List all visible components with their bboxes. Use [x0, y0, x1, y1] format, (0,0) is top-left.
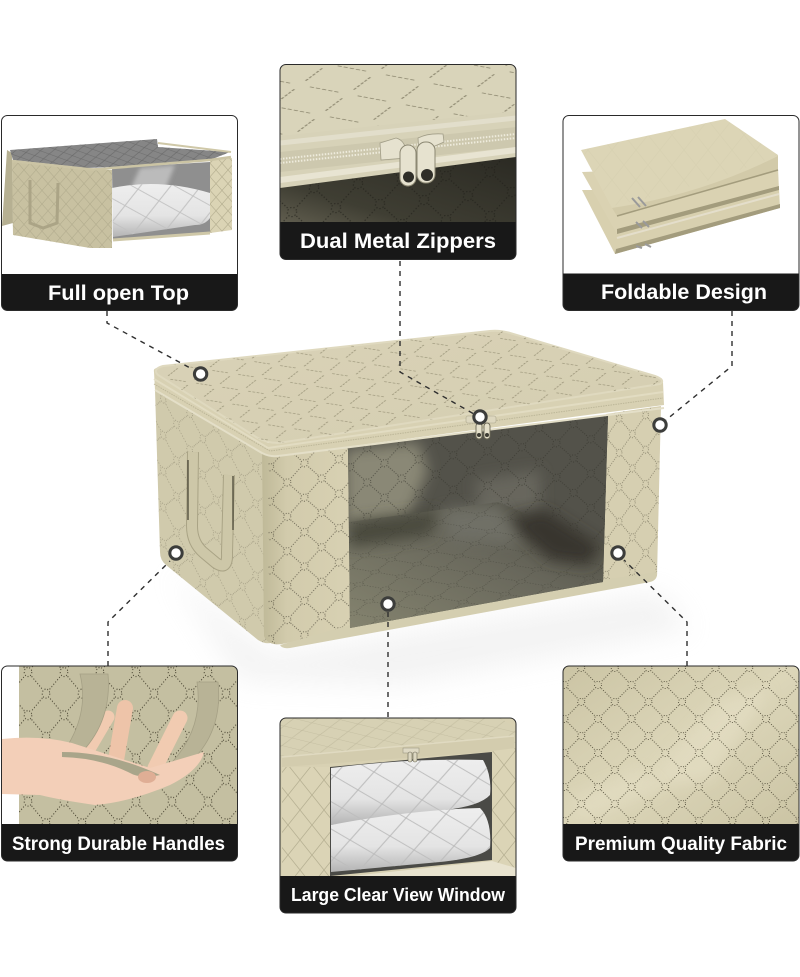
- handle and hand illustration: [2, 666, 239, 826]
- caption: Large Clear View Window: [291, 884, 506, 905]
- panel: foldable design: [561, 116, 800, 314]
- leader lines: [107, 261, 732, 718]
- marker: foldable: [654, 419, 666, 431]
- leader: premium quality fabric: [624, 560, 687, 666]
- panel: strong durable handles: [0, 666, 240, 864]
- box zipper pulls: [466, 416, 496, 439]
- label bar: [2, 824, 237, 860]
- clear view window: [348, 416, 608, 628]
- leader: dual metal zippers: [400, 261, 474, 414]
- callout markers: [170, 368, 666, 610]
- caption: Dual Metal Zippers: [300, 230, 496, 253]
- label bar: [278, 222, 518, 262]
- box bottom rim: [280, 572, 657, 648]
- box side handle: [188, 452, 233, 565]
- box front right panel: [602, 406, 661, 586]
- caption: Foldable Design: [601, 281, 767, 304]
- label bar: [2, 274, 237, 310]
- panel: large clear view window: [278, 718, 518, 916]
- box ground shadow: [170, 570, 690, 685]
- marker: handle: [170, 547, 182, 559]
- leader: strong durable handles: [108, 561, 170, 666]
- caption: Strong Durable Handles: [12, 833, 225, 855]
- marker: top: [194, 368, 207, 380]
- window with pillows illustration: [280, 718, 516, 876]
- panel: dual metal zippers: [278, 64, 518, 262]
- caption: Premium Quality Fabric: [575, 833, 787, 855]
- folded stack illustration: [581, 119, 780, 254]
- label bar: [564, 824, 798, 860]
- box left side with fabric pattern: [155, 390, 275, 643]
- box front left panel: [262, 446, 352, 644]
- marker: window: [382, 598, 394, 610]
- label bar: [280, 876, 516, 912]
- box lid zipper band: [154, 368, 664, 456]
- fabric swatch: [563, 666, 799, 826]
- marker: zipper: [474, 411, 486, 423]
- leader: large clear view window: [387, 612, 389, 718]
- leader: foldable design: [666, 311, 732, 420]
- main product: storage box: [154, 331, 690, 685]
- leader: full open top: [107, 311, 192, 369]
- panel: premium quality fabric: [561, 666, 800, 864]
- box lid top with fabric pattern: [156, 331, 662, 443]
- panel: full open top: [0, 116, 240, 314]
- marker: fabric: [612, 547, 624, 559]
- zipper close-up illustration: [280, 64, 516, 225]
- caption: Full open Top: [48, 282, 189, 305]
- label bar: [564, 274, 798, 310]
- open box illustration: [2, 139, 232, 248]
